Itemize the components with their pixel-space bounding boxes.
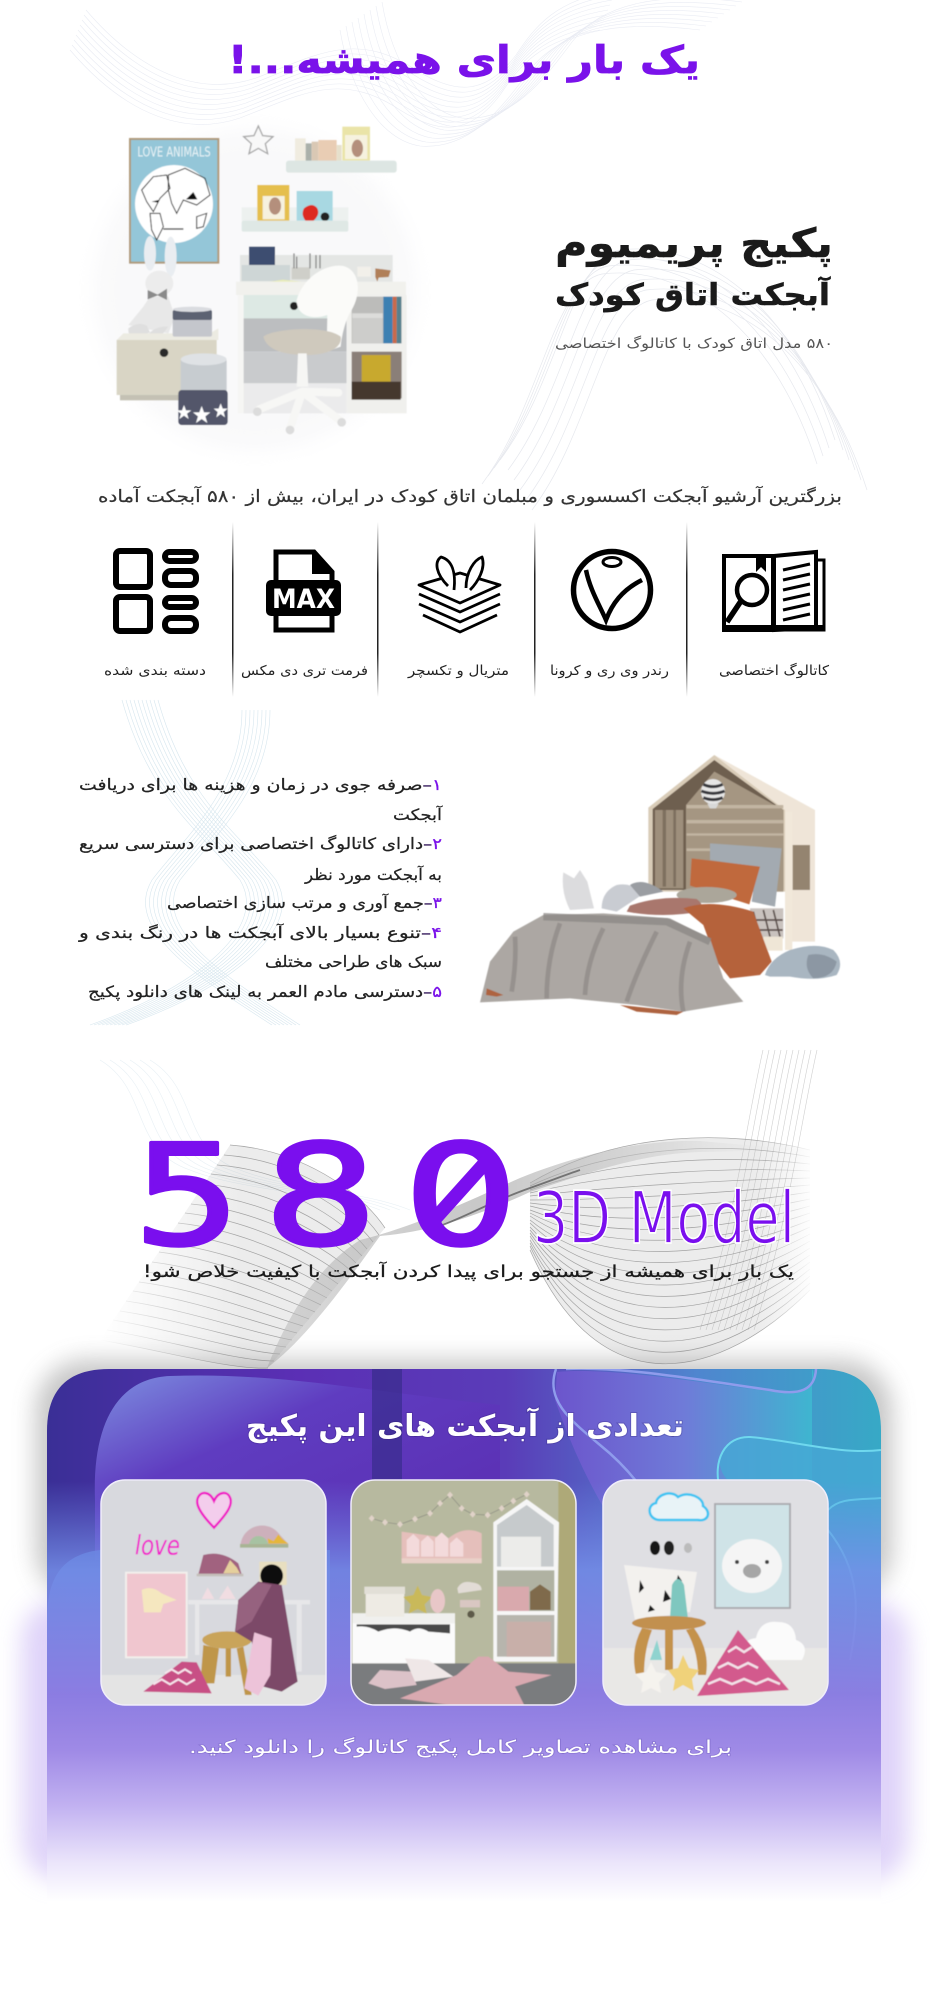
model count: 580 3D Model (133, 1115, 795, 1277)
plush toy (765, 946, 840, 979)
pink pillow (143, 1662, 212, 1693)
panel heading: تعدادی از آبجکت های این پکیج (246, 1407, 684, 1444)
feature: vray and corona render (550, 552, 669, 679)
pink house shelf (402, 1530, 482, 1562)
brown cushion (627, 898, 702, 915)
benefits list: ۲–دارای کاتالوگ اختصاصی برای دسترسی سریع (79, 834, 442, 854)
hero illustration: kids desk corner (95, 126, 415, 450)
model count tagline: یک بار برای همیشه از جستجو برای پیدا کردن آبجکت با کیفیت خلاص شو! (143, 1262, 795, 1282)
pillows (710, 843, 782, 907)
teal vase (670, 1579, 688, 1619)
big number (133, 1115, 518, 1277)
benefits list: ۳–جمع آوری و مرتب سازی اختصاصی (167, 893, 442, 913)
hero heading line 1: پکیج پریمیوم (555, 221, 833, 267)
big number: 0 (404, 1115, 518, 1277)
archive description line: بزرگترین آرشیو آبجکت اکسسوری و مبلمان اتاق کودک در ایران، بیش از ۵۸۰ آبجکت آماده (98, 485, 842, 507)
panel caption: برای مشاهده تصاویر کامل پکیج کاتالوگ را دانلود کنید. (189, 1737, 732, 1758)
bear poster (715, 1504, 790, 1608)
panel glow (22, 1360, 908, 1880)
3D Model label: 3D Model (533, 1176, 795, 1260)
star ornament (244, 126, 273, 154)
icon: layers with leaves (419, 557, 500, 632)
cat and round cushions (563, 870, 594, 910)
icon: v-ray logo (574, 552, 650, 628)
feature: categorised (104, 551, 206, 679)
hooks (650, 1541, 660, 1555)
house bed illustration (480, 755, 840, 1015)
title: یک بار برای همیشه...! (228, 38, 700, 82)
star cushion (624, 1565, 697, 1620)
storage box and toys (365, 1594, 405, 1616)
blanket (235, 1582, 298, 1692)
pink poster (126, 1573, 187, 1657)
benefits list: آبجکت (393, 805, 443, 824)
icon: MAX file: MAX (272, 584, 335, 615)
card borders (101, 1480, 828, 1705)
icon: category grid (116, 551, 196, 631)
neon heart (197, 1493, 231, 1528)
benefits list: ۴–تنوع بسیار بالای آبجکت ها در رنگ بندی و (78, 923, 442, 943)
card: bookcase room (350, 1480, 578, 1707)
house frame (714, 755, 815, 942)
desk (188, 1600, 310, 1672)
rainbow shelf (241, 1525, 288, 1544)
orange throw (683, 904, 772, 978)
label: دسته بندی شده (104, 663, 206, 679)
wooden stool (632, 1616, 706, 1630)
feature: exclusive catalogue (719, 552, 830, 679)
label: رندر وی ری و کرونا (550, 663, 669, 679)
dotted storage box (117, 328, 218, 400)
house bookcase (493, 1499, 559, 1662)
pink zigzag pyramid (697, 1630, 789, 1696)
white bench (352, 1622, 456, 1664)
stacked tins with stars (177, 353, 228, 425)
neon cloud (650, 1493, 708, 1520)
grey tin (173, 307, 212, 337)
bunting (372, 1494, 527, 1524)
black frame (259, 1562, 287, 1585)
star rug (400, 1657, 552, 1707)
small stars (635, 1664, 666, 1692)
neon love: love (135, 1530, 180, 1561)
label: کاتالوگ اختصاصی (719, 662, 830, 679)
label: فرمت تری دی مکس (241, 663, 368, 679)
swivel chair (253, 266, 358, 434)
card: neon cloud corner (603, 1480, 828, 1705)
grey blanket (480, 913, 743, 1012)
card: neon love desk (100, 1480, 327, 1708)
upper shelf with books (286, 127, 397, 173)
panel ribbons (48, 1369, 881, 1706)
benefits list: ۵–دسترسی مادم العمر به لینک های دانلود پکیج (88, 983, 442, 1002)
big number: 5 (133, 1115, 241, 1277)
feature: material and texture (407, 557, 509, 679)
cushions (368, 1670, 417, 1689)
benefits list: سبک های طراحی مختلف (265, 953, 442, 971)
panel: sample objects (47, 1369, 881, 1930)
lower shelf with books (242, 185, 348, 232)
stool (202, 1631, 252, 1649)
hanging balloon (701, 779, 725, 808)
poster: world map (130, 139, 218, 263)
benefits list (78, 776, 443, 1002)
hero heading line 2: آبجکت اتاق کودک (555, 276, 831, 313)
poster: world map: LOVE ANIMALS (137, 146, 211, 161)
watermelon shelf (198, 1554, 242, 1574)
big number: 8 (264, 1115, 377, 1277)
striped mattress (750, 908, 783, 938)
rabbit toy (128, 236, 177, 338)
hero subheading: ۵۸۰ مدل اتاق کودک با کاتالوگ اختصاصی (555, 334, 833, 352)
cloud pillow (744, 1622, 805, 1660)
desk (236, 247, 407, 413)
label: متریال و تکسچر (407, 663, 509, 679)
icon: open book with magnifier (724, 552, 824, 631)
benefits list: به آبجکت مورد نظر (304, 865, 442, 884)
feature: 3ds max format (241, 552, 368, 679)
benefits list: ۱–صرفه جوی در زمان و هزینه ها برای دریافت (79, 776, 442, 795)
